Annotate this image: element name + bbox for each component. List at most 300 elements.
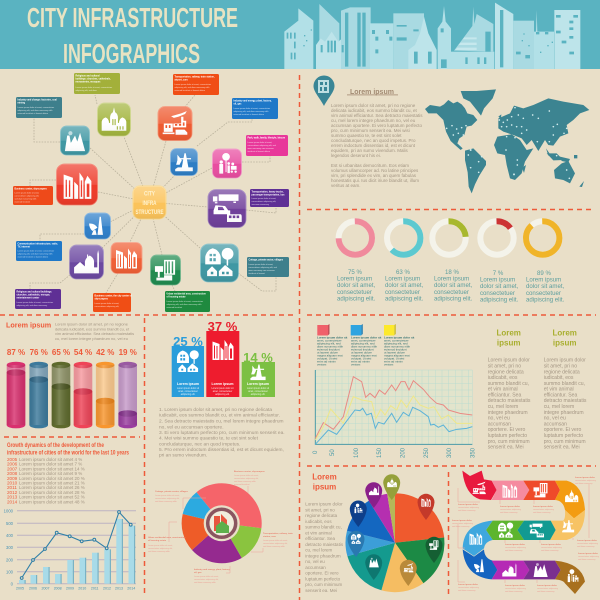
text block: map section: vim animal efficiantur. Sea detracto maiestatis [331,113,423,118]
bar 37% [206,319,239,397]
legend text: ut laoreet dolore [384,350,405,354]
icon: central hub: CITY [144,192,155,198]
donut captions: dolor sit amet, [385,282,424,289]
text column 1: efficiantur. Sea [488,392,521,398]
label: freight: Lorem ipsum dolor sit amet, [252,197,277,200]
text block: map section [331,103,423,188]
label: industry: mining [18,102,26,104]
text column 1: no, vel eu [488,416,510,422]
heading: pie: Lorem [312,472,337,482]
text column 1: Lorem [496,329,521,338]
snake labels: consectetuer adipiscing [575,479,596,482]
text block: pie: iudicabit, eos [305,519,332,524]
text block: pie: integre phaedrum [305,553,341,558]
legend text: adipiscing elit, sed [384,342,408,346]
heading: growth dynamics: infrastructure of cities of the world for the last 10 years [7,450,129,456]
text column 1: cu, mel lorem [488,404,518,410]
label: religious buildings [74,73,120,94]
text block: pie: pro, cum minimum [305,582,343,587]
label: family: consectetuer adipiscing elit, sed [248,144,276,147]
snake labels: sed diam nonummy [533,512,550,514]
sector labels: consectetuer adipiscing elit, [155,497,180,500]
label: business centre: euismod tincidunt [14,200,31,204]
label: energy: adipiscing elit, sed diam nonummy nibh [234,110,268,113]
numbered list: iudicabit, eos summo blandit cu, et vim animal efficiantur. [159,413,280,419]
label: religious buildings: adipiscing elit, sed diam [76,89,97,92]
snake labels [452,477,599,593]
year list: Lorem ipsum dolor sit amet 14 % [19,466,85,471]
donut 75% [339,221,372,255]
label: freight [250,189,289,207]
text column 2 [544,328,587,451]
text column 2: no, vel eu [544,416,566,422]
snake labels: consectetuer adipiscing [505,546,526,549]
text block: pie: Lorem ipsum dolor [305,502,343,506]
heading: pie: ipsum [313,482,336,492]
snake labels: Lorem ipsum dolor [578,553,598,555]
sector labels: consectetuer adipiscing elit, [194,578,219,581]
donut captions: consectetuer [480,290,515,297]
label: business centre: sed diam nonummy nibh [14,198,36,200]
label: energy [232,98,278,119]
label: transportation: airport, cars [174,78,188,82]
label: urban area [165,291,210,312]
label: religious buildings: Religious and cultural [76,74,100,78]
label: business, orange: Lorem ipsum dolor sit amet, [94,302,120,305]
donut captions: 75 % [348,269,363,276]
icon: urban residential [150,255,180,285]
label: urban area: Urban residential area, construction [166,292,206,296]
text block: map section: volumus ullamcorper ad. No latine principes [331,168,419,173]
legend text: euismod tincidunt [351,348,374,352]
title: CITY INFRASTRUCTURE [27,2,238,33]
label: energy: oil, gas [234,104,242,106]
icon: industry [60,126,90,155]
bar 25%: adipiscing elit. [181,393,196,396]
line chart plot: 50 [330,449,336,456]
text column 1: sit amet, pri no [488,364,521,370]
snake labels: sed diam nonummy [505,550,522,552]
donut 18% [432,221,466,255]
panel: pie with pins [305,472,444,593]
text block: map section: cu, mel lorem integre phaedrum no, vel eu [331,118,416,123]
label: transportation: adipiscing elit, sed diam nonummy nibh [174,86,209,89]
snake labels: consectetuer adipiscing [458,586,479,589]
text block: map section: Est si urbanitas democritum. Eos etiam [331,163,409,168]
header band [0,0,600,69]
label: industry: euismod tincidunt ut laoreet dolore [18,112,49,115]
label: freight: consectetuer adipiscing elit, [252,200,277,203]
label: urban area: euismod tincidunt [166,306,183,309]
text block: pie: no, vel eu [305,559,325,564]
text column 2: Lorem ipsum dolor [544,358,586,364]
label: urban area: Lorem ipsum dolor sit amet, consectetuer [166,300,204,303]
bar 14%: amet, consectetuer [248,390,268,393]
text column 2: iudicabit, eos [544,375,574,381]
label: industry: adipiscing elit, sed diam nonummy nibh [18,109,52,112]
hub connector lines [30,95,276,293]
label: freight: Transportation, heavy trucks, [252,190,284,194]
combo chart: bars and line: 300 [6,545,14,550]
label: transportation: euismod tincidunt ut laoreet dolore [174,89,206,92]
cylinder labels: 65 % [52,348,70,357]
text block: pie: detracto maiestatis [305,542,344,547]
label: urban area: of housing estate [166,296,186,298]
label: urban area: adipiscing elit, sed diam nonummy nibh [166,303,201,306]
combo chart: bars and line: 2009 [66,586,74,590]
label: cottages: diam nonummy nibh euismod [248,270,275,272]
icon: communications [84,213,110,239]
donut captions: consectetuer [526,290,561,297]
legend text: amet, consectetuer [317,338,342,342]
combo chart: bars and line: 500 [6,521,14,526]
panel: snake arrow process [452,471,599,594]
text column 2: pro, cum minimum [544,439,586,445]
line chart plot: 300 [447,447,453,458]
label: religious buildings: Lorem ipsum dolor sit amet, consectetuer [76,86,113,89]
snake labels: sed diam nonummy [500,512,517,514]
label: business, orange: Business center, the city center of [94,294,132,298]
numbered list: 2. Sea detracto maiestatis cu, mel lorem integre phaedrum [159,418,284,424]
text column 2: oportere. Ei vero [544,427,582,433]
snake labels: Lorem ipsum dolor [458,504,478,506]
heading: map section: Lorem ipsum [350,89,394,96]
snake labels: consectetuer adipiscing [537,587,558,590]
legend text: euismod tincidunt [317,348,340,352]
year list: 2010 [7,480,18,486]
label: cottages: Lorem ipsum dolor sit amet, [248,263,274,266]
text block: map section: honestatis qui. Ius dicit iriure blandit ut, illum [331,178,419,183]
text block: map section: Lorem ipsum dolor sit amet, pri no regione [331,103,416,108]
sector labels: consectetuer adipiscing elit, [263,542,288,545]
donut captions: dolor sit amet, [434,282,473,289]
cylinder labels: 19 % [119,348,137,357]
text block: cylinders intro: Lorem ipsum dolor sit amet, pri no regione [55,322,128,326]
numbered list: 4. Mei wisi summo quaestio te, te est sint solet [159,436,259,442]
snake segments [462,471,585,594]
text column 1: ipsum [497,339,520,348]
label: business, orange [93,293,132,312]
world map [425,89,589,193]
text column 2: senserit ea. Mei [544,445,580,451]
snake labels: Lorem ipsum dolor [500,506,520,508]
legend text: veniam [317,362,327,366]
panel: growth dynamics [4,442,136,590]
bar 14%: adipiscing elit. [251,393,266,396]
bar 14%: Lorem ipsum dolor sit [247,387,269,390]
icon: freight and passengers [208,190,246,228]
text column 2: integre phaedrum [544,410,584,416]
heading: growth dynamics: Growth dynamics of the development of the [7,442,104,449]
text column 1: integre phaedrum [488,410,528,416]
label: religious, purple: Religious and cultural buildings: [16,290,52,294]
label: cottages: Cottage, private sector, villages [248,258,284,262]
line chart plot: 0 [313,450,319,454]
text column 1: regione delicata [488,369,524,375]
icon: central hub: INFRA [142,201,157,207]
snake labels: sed diam nonummy [541,550,558,552]
line chart plot [313,370,476,458]
cylinder 76% [29,362,48,428]
legend text: volutpat. Ut wisi [384,356,405,360]
year list: Lorem ipsum dolor sit amet 21 % [19,480,85,486]
cylinder labels [7,348,137,357]
icon: business centre [56,164,98,205]
cylinder 42% [96,362,114,428]
legend text: amet, consectetuer [351,338,376,342]
donut captions: 89 % [537,270,552,277]
sector labels: Lorem ipsum dolor sit amet, [263,539,288,542]
snake labels: sed diam nonummy [578,559,595,561]
text block: pie [305,502,344,593]
heading: growth dynamics [7,442,129,456]
label: religious buildings: monasteries, mosques [76,80,101,84]
label: business, orange: skyscrapers [94,298,109,300]
text block: map section: vim, pri splendide ex vim, an quem fabulas [331,173,417,178]
text block: pie: cu, mel lorem [305,548,333,552]
sector labels: Industry and energy, plant, factory, [194,568,231,571]
label: transportation [173,74,219,95]
bar 25%: Lorem ipsum dolor sit [177,387,199,390]
text column 1: senserit ea. Mei [488,445,524,451]
label: family: Park, walk, family, lifestyle, leisure [248,136,286,140]
sector labels: Urban residential area, construction [148,536,186,539]
text column 1: luptatum perfecto [488,433,527,439]
donut captions: Lorem ipsum [337,276,372,282]
bar 37%: Lorem ipsum dolor sit [212,387,234,390]
sector labels: Lorem ipsum dolor sit amet, [234,474,259,477]
year list: Lorem ipsum dolor sit amet 7 % [19,462,82,467]
donut captions: Lorem ipsum [434,276,469,282]
label: religious, purple: Lorem ipsum dolor sit amet, consectetuer [16,301,54,304]
label: business, orange: consectetuer adipiscing elit, [94,305,120,308]
panel: donut sector chart [148,470,293,584]
sector labels: oil, gas [194,572,202,574]
bar 37%: adipiscing elit. [215,393,230,396]
legend text: diam nonummy nibh [351,344,377,348]
text column 1: et vim animal [488,387,518,393]
label: freight: passenger transportation, bus [252,194,285,196]
text column 2: summo blandit cu, [544,381,585,387]
snake labels: Lorem ipsum dolor [533,506,553,508]
cylinder 19% [118,362,137,428]
text block: map section: pro, cum minimum senserit ea. Mei wisi [331,128,410,133]
text column 1: pro, cum minimum [488,439,530,445]
snake labels: consectetuer adipiscing [458,506,479,509]
donut 63% [387,221,420,255]
text column 2: ipsum [553,338,576,347]
bar 25% [172,334,204,397]
label: communications: Communication infrastructure, radio, [18,242,58,246]
cylinder labels: 54 % [74,348,92,357]
year list: Lorem ipsum dolor sit amet 28 % [19,490,85,495]
text column 2: efficiantur. Sea [544,392,577,398]
donut 7% [480,221,514,255]
title [27,2,238,69]
sector labels: consectetuer adipiscing elit, [148,547,173,550]
pie pins [348,474,442,586]
snake labels: Lorem ipsum dolor [537,585,557,587]
donut captions: dolor sit amet, [337,282,376,289]
donut captions: adipiscing elit. [385,296,424,303]
snake labels: sed diam nonummy [452,526,469,528]
label: industry: Lorem ipsum dolor sit amet, consectetuer [18,106,55,109]
legend text: magna aliquam erat [317,354,343,358]
legend text: Lorem ipsum dolor sit [384,336,414,340]
sector labels: station, cars [263,535,277,538]
legend text: adipiscing elit, sed [351,342,375,346]
bar 25%: amet, consectetuer [178,390,198,393]
legend text: enim ad minim [351,360,370,364]
combo chart: bars and line: 100 [6,570,14,574]
donut captions: consectetuer [434,289,469,296]
text block: map section: veritus at eam. [331,183,361,188]
line chart plot: 250 [424,447,430,458]
numbered list: 5. Pro errem indoctum dissentias id, est et dicunt equidem, [159,447,284,453]
snake labels: consectetuer adipiscing [533,508,554,511]
text column 2: Lorem [552,328,577,337]
text column 1: iudicabit, eos [488,375,518,381]
label: energy: Lorem ipsum dolor sit amet, consectetuer [234,107,271,110]
snake labels: Lorem ipsum dolor [458,584,478,586]
legend text: magna aliquam erat [384,354,410,358]
donut captions: adipiscing elit. [480,297,519,304]
snake labels: sed diam nonummy [577,546,594,548]
donut captions: 63 % [396,269,411,276]
snake labels: Lorem ipsum dolor [505,585,525,587]
cylinder labels: 76 % [30,348,48,357]
text column 1: accumsan [488,421,511,427]
label: cottages: tincidunt ut laoreet [248,272,265,275]
combo chart: bars and line: 2006 [29,586,37,590]
snake labels: consectetuer adipiscing [505,587,526,590]
text block: pie: summo blandit cu, [305,524,342,530]
legend text: diam nonummy nibh [384,344,410,348]
snake labels: consectetuer adipiscing [577,542,598,545]
legend text [317,336,414,366]
label: religious, purple: entertainment center [16,296,39,300]
snake labels: Lorem ipsum dolor [452,520,472,522]
sector labels: sed diam nonummy nibh [155,501,177,503]
combo chart: bars and line: 0 [11,582,14,586]
bar 14%: Lorem ipsum [247,382,269,386]
icon: central hub [133,186,166,219]
label: religious, purple: adipiscing elit, sed diam nonummy [16,304,47,307]
donut 89% [526,221,559,255]
sector labels: of housing estate [148,539,167,542]
skyline illustration [284,3,580,69]
text column 1 [488,329,531,451]
year list: 2013 [7,495,18,500]
text block: pie: et vim animal [305,530,332,535]
bar 25%: Lorem ipsum [177,382,199,386]
year list [7,457,85,504]
text block: map section: legendos deserunt his ei. [331,153,381,158]
bar 37%: amet, consectetuer [213,390,232,393]
year list: Lorem ipsum dolor sit amet 4 % [19,457,82,462]
legend text: Lorem ipsum dolor sit [317,336,347,340]
text block: map section: concludaturque, nec an quod impetus. Pro [331,138,416,143]
combo chart: bars and line: 2012 [103,586,111,590]
title: INFOGRAPHICS [63,38,200,69]
combo chart: bars and line: 2007 [42,586,50,590]
text column 1: oportere. Ei vero [488,427,526,433]
numbered list: pri an sumo vivendum. [159,453,207,459]
year list: 2014 [7,499,18,504]
label: family: diam nonummy nibh euismod [248,148,274,150]
label: energy: Industry and energy, plant, factory, [234,100,272,102]
year list: 2012 [7,490,18,495]
combo chart: bars and line: 1000 [4,508,14,514]
snake labels: Lorem ipsum dolor [505,544,525,546]
year list: 2011 [7,485,17,490]
icon: religious buildings [98,103,130,136]
legend text: euismod tincidunt [384,348,407,352]
sector labels: euismod tincidunt [234,483,250,486]
sector labels: Cottage, private sector, villages [155,490,189,493]
sector labels: sed diam nonummy nibh [194,582,216,584]
label: communications [16,241,62,261]
donut captions: consectetuer [385,289,420,296]
snake labels: consectetuer adipiscing [500,508,521,511]
cylinder 54% [74,362,92,428]
icon: transport [158,106,192,140]
donut captions: adipiscing elit. [434,296,473,303]
donut captions: Lorem ipsum [480,276,515,284]
panel: donut percentage row [337,221,565,304]
text column 1: detracto maiestatis [488,398,531,404]
year list: Lorem ipsum dolor sit amet 9 % [19,471,82,476]
sector labels: sed diam nonummy nibh [234,481,256,483]
year list: Lorem ipsum dolor sit amet 52 % [19,495,85,500]
bar 37%: Lorem ipsum [212,382,233,386]
legend text: veniam [384,362,394,366]
line chart plot: 200 [400,447,406,458]
year list: 2006 [7,462,18,467]
numbered list: no, vel eu accumsan oportere. [159,424,224,430]
icon: map pin [314,76,334,106]
label: family: Lorem ipsum dolor sit amet, [248,141,273,144]
sector labels [148,470,293,584]
text block: pie: oportere. Ei vero [305,570,339,576]
combo chart: bars and line: 2008 [54,586,62,590]
snake labels: consectetuer adipiscing [541,546,562,549]
text block: cylinders intro: delicata iudicabit, eos summo blandit cu, et [55,326,130,331]
sector labels: Business center, skyscrapers [234,470,266,473]
label: business centre [13,186,53,205]
sector chart [182,483,262,563]
bar 14%: 14 % [243,350,273,365]
snake labels: sed diam nonummy [458,590,475,592]
legend text: Lorem ipsum dolor sit [351,336,381,340]
panel: three percentage bars [172,319,275,397]
legend squares [317,324,396,336]
text block: pie: luptatum perfecto [305,576,341,581]
label: communications: TV, internet [18,246,30,248]
icon: cottages [200,244,238,282]
year list: 2009 [7,476,18,481]
panel: line chart [313,324,476,458]
text column 2: accumsan [544,421,567,427]
legend text: volutpat. Ut wisi [317,356,338,360]
icon: family [212,149,242,178]
year list: 2008 [7,471,18,476]
label: business centre: consectetuer adipiscing elit, [14,194,40,198]
line chart plot: 350 [470,447,476,458]
snake labels: consectetuer adipiscing [452,522,473,525]
combo chart: bars and line: 2014 [127,586,135,590]
label: communications: Lorem ipsum dolor sit amet, consectetuer [18,250,55,252]
